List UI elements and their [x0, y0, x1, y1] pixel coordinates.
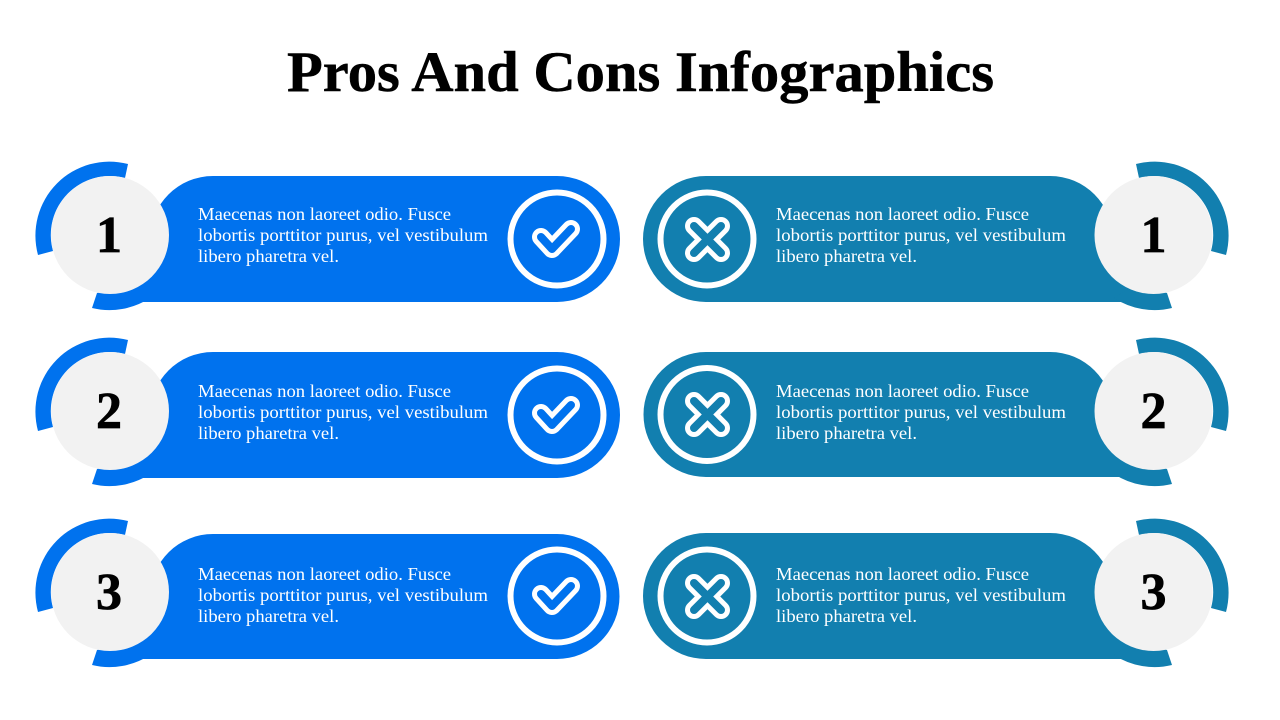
- text block: lobortis porttitor purus, vel vestibulum: [198, 225, 488, 245]
- text block: [198, 381, 488, 443]
- pill: [110, 176, 620, 302]
- text block: libero pharetra vel.: [776, 423, 917, 443]
- icon: check: [510, 368, 604, 462]
- number: 3: [1140, 564, 1166, 621]
- text block: libero pharetra vel.: [776, 606, 917, 626]
- text block: libero pharetra vel.: [776, 246, 917, 266]
- panel: pro 1: [35, 162, 620, 310]
- text block: Maecenas non laoreet odio. Fusce: [198, 204, 451, 224]
- number ring: [35, 162, 150, 310]
- number ring: [35, 519, 150, 667]
- text block: [198, 204, 488, 266]
- number: 3: [96, 564, 122, 621]
- text block: libero pharetra vel.: [198, 606, 339, 626]
- number ring: [35, 338, 150, 486]
- text block: [198, 564, 488, 626]
- text block: Maecenas non laoreet odio. Fusce: [198, 564, 451, 584]
- text block: libero pharetra vel.: [198, 246, 339, 266]
- icon: check: [510, 550, 604, 642]
- pill: [110, 352, 620, 478]
- text block: libero pharetra vel.: [198, 423, 339, 443]
- number ring: [1114, 519, 1229, 667]
- title: Pros And Cons Infographics: [287, 41, 994, 104]
- panel: pro 2: [35, 338, 620, 486]
- number circle: [1094, 533, 1212, 651]
- icon: check: [510, 192, 604, 286]
- text block: Maecenas non laoreet odio. Fusce: [198, 381, 451, 401]
- icon: cross: [660, 192, 754, 286]
- number circle: [1094, 176, 1212, 294]
- text block: lobortis porttitor purus, vel vestibulum: [776, 402, 1066, 422]
- number circle: [1094, 352, 1212, 470]
- panel: con 3: [643, 519, 1229, 667]
- pill: [644, 352, 1154, 477]
- panel: con 2: [644, 338, 1229, 486]
- text block: [776, 564, 1066, 626]
- number ring: [1114, 162, 1229, 310]
- number: 2: [96, 383, 122, 440]
- text block: [776, 204, 1066, 266]
- number circle: [51, 176, 169, 294]
- text block: lobortis porttitor purus, vel vestibulum: [198, 585, 488, 605]
- number ring: [1114, 338, 1229, 486]
- icon: cross: [660, 368, 754, 461]
- number circle: [51, 352, 169, 470]
- panel: con 1: [643, 162, 1229, 310]
- number circle: [51, 533, 169, 651]
- number: 1: [96, 207, 122, 264]
- panel: pro 3: [35, 519, 620, 667]
- icon: cross: [660, 550, 754, 642]
- text block: Maecenas non laoreet odio. Fusce: [776, 204, 1029, 224]
- text block: lobortis porttitor purus, vel vestibulum: [776, 225, 1066, 245]
- pill: [643, 176, 1154, 302]
- text block: Maecenas non laoreet odio. Fusce: [776, 381, 1029, 401]
- number: 1: [1140, 207, 1166, 264]
- text block: [776, 381, 1066, 443]
- text block: lobortis porttitor purus, vel vestibulum: [198, 402, 488, 422]
- text block: Maecenas non laoreet odio. Fusce: [776, 564, 1029, 584]
- number: 2: [1140, 383, 1166, 440]
- pill: [110, 534, 620, 659]
- text block: lobortis porttitor purus, vel vestibulum: [776, 585, 1066, 605]
- pill: [643, 533, 1154, 659]
